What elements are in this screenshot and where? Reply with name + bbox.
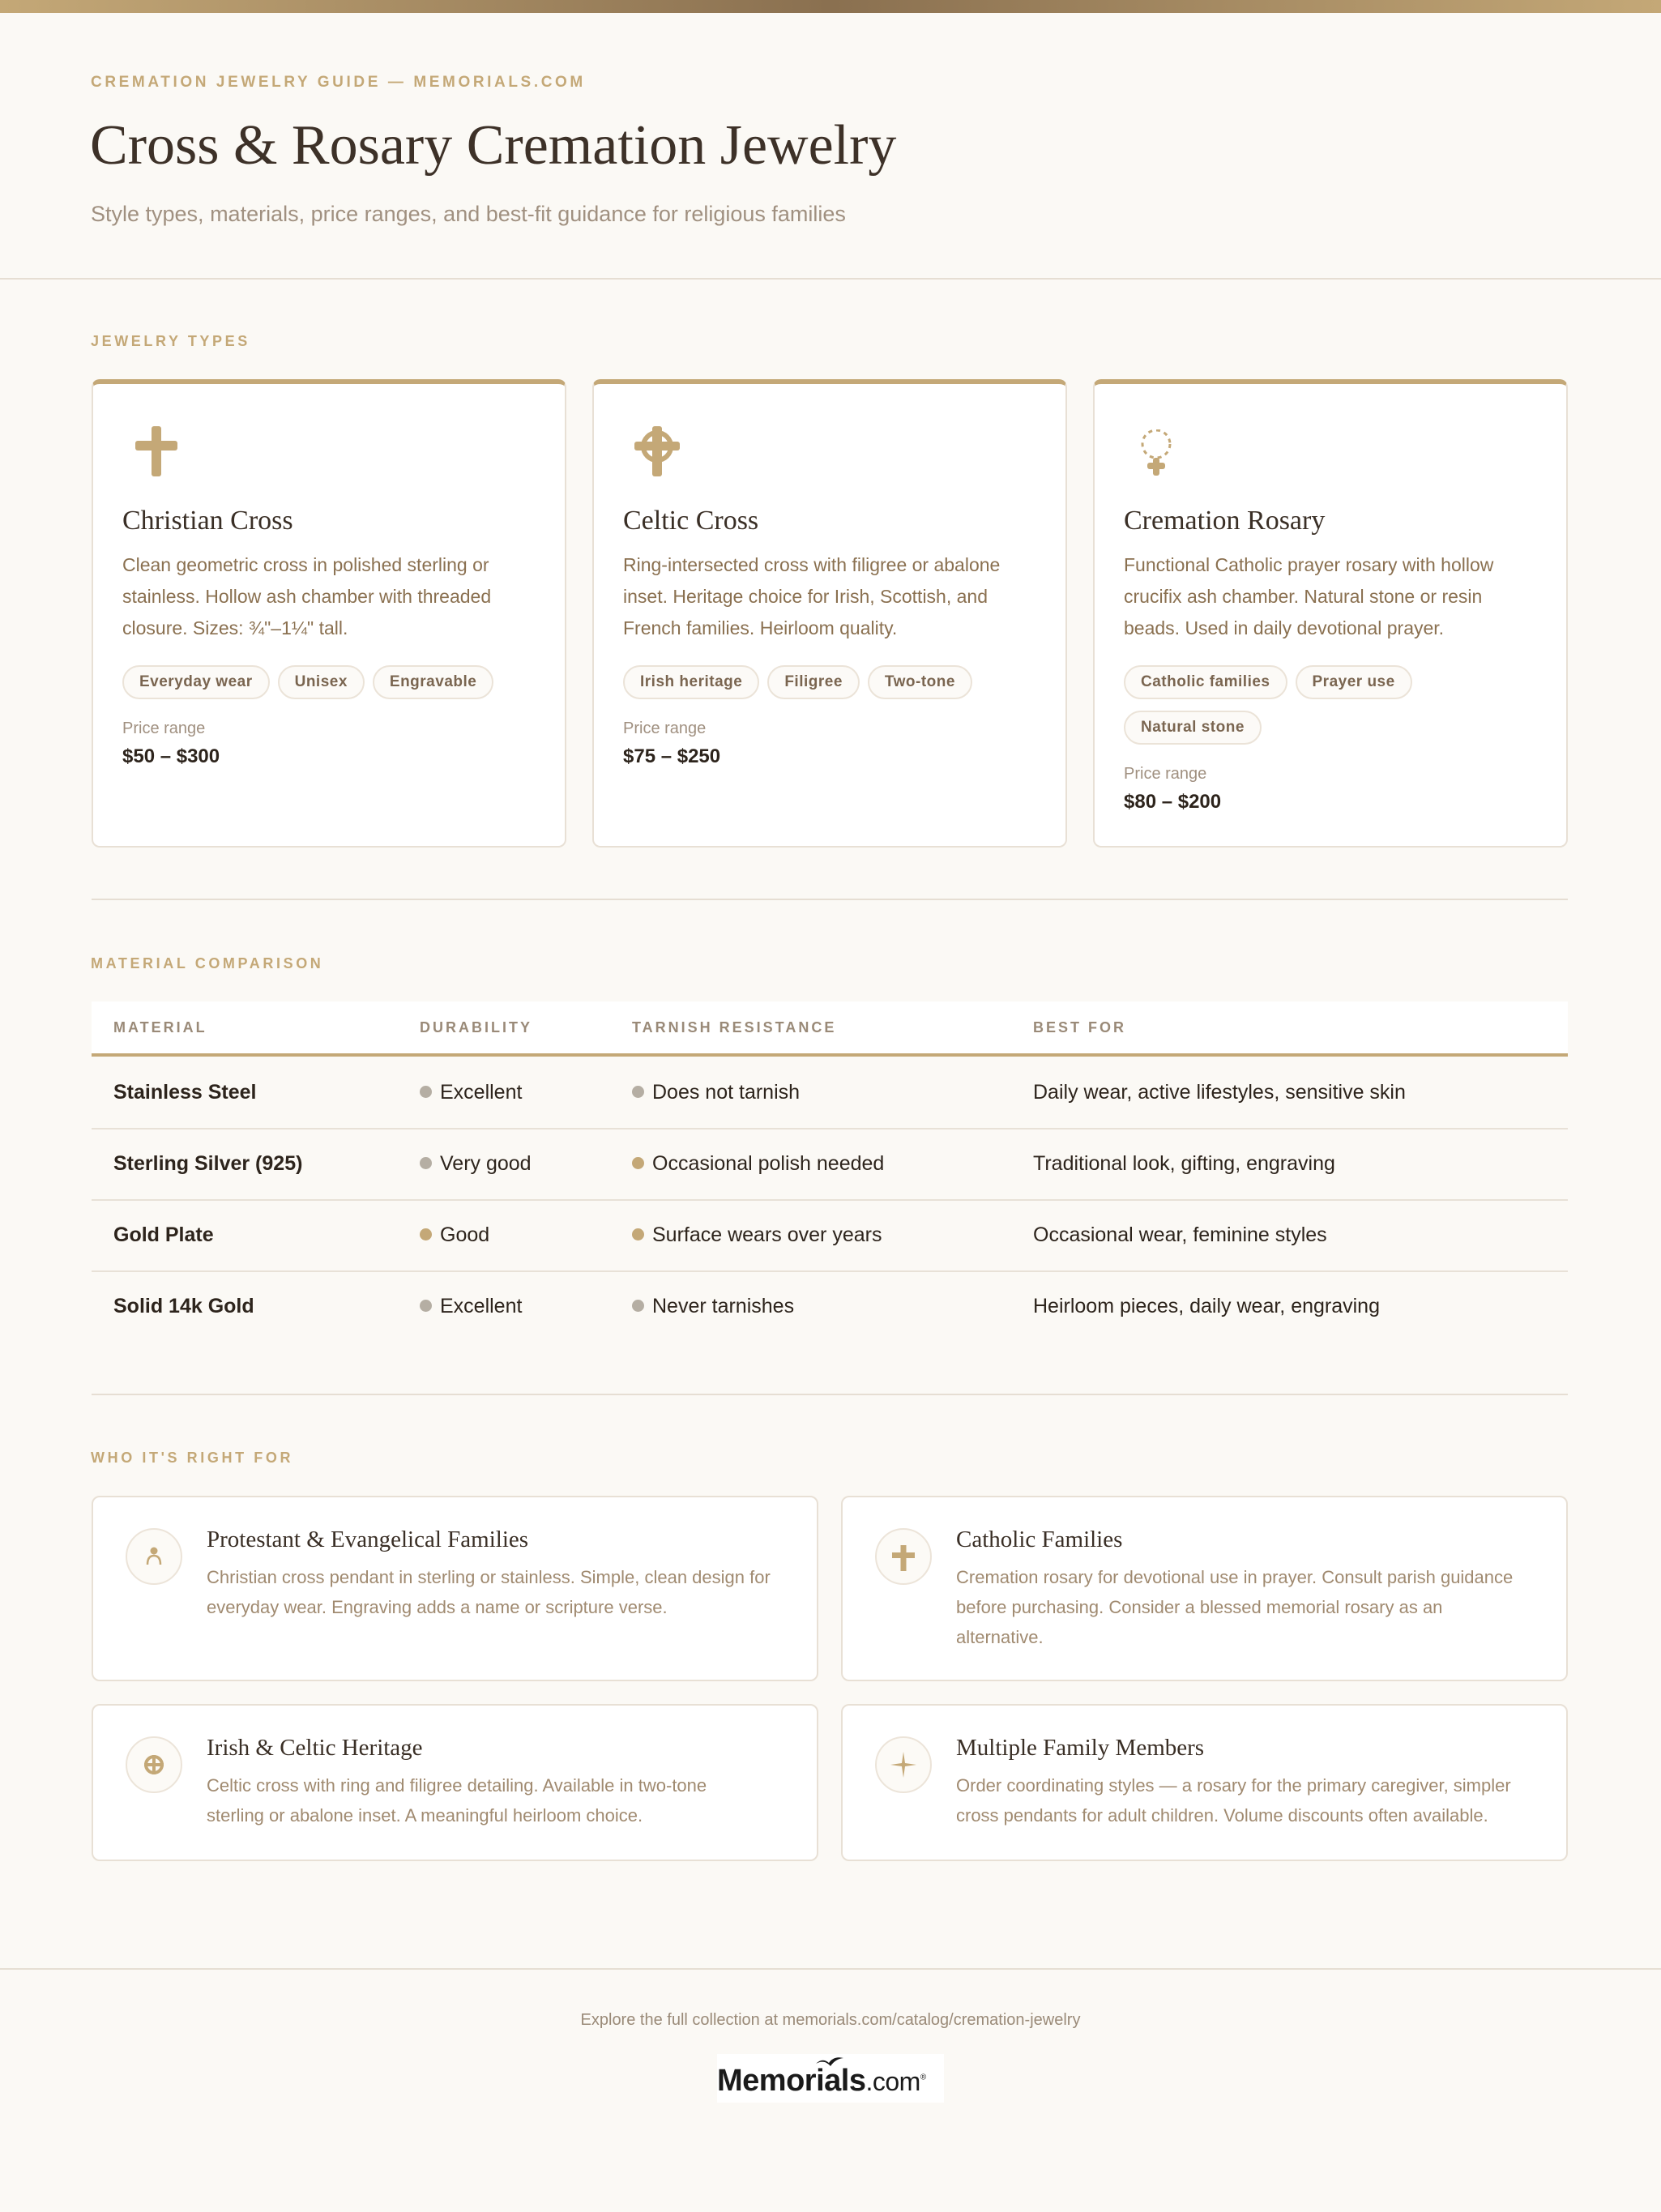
row: sterling silver: Very good <box>440 1152 532 1175</box>
logo <box>717 2054 944 2103</box>
panel: irish celtic <box>92 1704 818 1861</box>
top gradient bar <box>0 0 1661 13</box>
panel: catholic: Cremation rosary for devotional use in prayer. Consult parish guidance before purchasing. Consider a blessed memorial rosary as an alternative. <box>956 1567 1513 1647</box>
price: Price range <box>122 720 205 737</box>
logo: Memorials.com® <box>717 2064 926 2098</box>
eyebrow: CREMATION JEWELRY GUIDE — MEMORIALS.COM <box>91 74 586 91</box>
tags: Everyday wear <box>139 673 253 690</box>
tags <box>623 665 972 699</box>
price: Price range <box>623 720 706 737</box>
title: Celtic Cross <box>623 506 758 536</box>
title: Cremation Rosary <box>1124 506 1325 536</box>
tags: Two-tone <box>885 673 955 690</box>
panel: multiple family: Order coordinating styles — a rosary for the primary caregiver, simpler cross pendants for adult children. Volume discounts often available. <box>956 1775 1511 1826</box>
row: solid gold: Excellent <box>440 1295 522 1317</box>
panel: multiple family: Multiple Family Members <box>956 1735 1204 1761</box>
row: sterling silver: Occasional polish needed <box>652 1152 884 1175</box>
row: stainless steel: Does not tarnish <box>652 1081 800 1104</box>
icon: person <box>126 1528 182 1585</box>
title: Cross & Rosary Cremation Jewelry <box>90 114 896 177</box>
row: sterling silver <box>92 1129 1568 1201</box>
table: material comparison <box>92 1001 1568 1317</box>
section label: material comparison: MATERIAL COMPARISON <box>91 955 323 971</box>
panel: catholic <box>841 1496 1568 1681</box>
icon: rosary <box>1141 429 1172 476</box>
tags <box>122 665 493 699</box>
row: solid gold: Never tarnishes <box>652 1295 794 1317</box>
tags: Filigree <box>784 673 843 690</box>
row: stainless steel: Excellent <box>440 1081 522 1104</box>
tags: Natural stone <box>1141 719 1245 736</box>
row: solid gold <box>113 1295 1380 1317</box>
row: stainless steel: Stainless Steel <box>113 1081 256 1104</box>
row: stainless steel: Daily wear, active lifestyles, sensitive skin <box>1033 1081 1406 1104</box>
row: gold plate: Gold Plate <box>113 1223 214 1246</box>
panel: irish celtic: Celtic cross with ring and filigree detailing. Available in two-tone sterling or abalone inset. A meaningful heirloom choice. <box>207 1775 707 1826</box>
tags: Irish heritage <box>640 673 742 690</box>
title: Christian Cross <box>122 506 293 536</box>
tags: Engravable <box>390 673 476 690</box>
panel: protestant: Protestant & Evangelical Families <box>207 1527 528 1552</box>
icon: cross <box>875 1528 932 1585</box>
card: Celtic Cross <box>592 379 1067 848</box>
description: Ring-intersected cross with filigree or abalone inset. Heritage choice for Irish, Scottish, and French families. Heirloom quality. <box>623 554 1000 638</box>
row: sterling silver: Sterling Silver (925) <box>113 1152 302 1175</box>
panel: catholic: Catholic Families <box>956 1527 1122 1552</box>
table: material comparison: TARNISH RESISTANCE <box>632 1019 836 1036</box>
card: Cremation Rosary: $80 – $200 <box>1124 791 1221 813</box>
tags: Prayer use <box>1313 673 1395 690</box>
icon: cross <box>135 426 177 476</box>
section label: jewelry types: JEWELRY TYPES <box>91 333 250 349</box>
section label: who it's right for: WHO IT'S RIGHT FOR <box>91 1450 293 1466</box>
panel: irish celtic: Irish & Celtic Heritage <box>207 1735 423 1761</box>
panel: protestant: Christian cross pendant in sterling or stainless. Simple, clean design for everyday wear. Engraving adds a name or scripture verse. <box>207 1567 771 1617</box>
panel: protestant <box>92 1496 818 1681</box>
subtitle: Style types, materials, price ranges, and best-fit guidance for religious families <box>91 202 846 226</box>
card: Christian Cross <box>92 379 566 848</box>
row: gold plate: Surface wears over years <box>652 1223 882 1246</box>
row: solid gold: Heirloom pieces, daily wear, engraving <box>1033 1295 1380 1317</box>
row: gold plate: Good <box>440 1223 489 1246</box>
description: Clean geometric cross in polished sterling or stainless. Hollow ash chamber with threaded closure. Sizes: ¾"–1¼" tall. <box>122 554 491 638</box>
tags: Unisex <box>295 673 348 690</box>
row: gold plate <box>92 1201 1568 1272</box>
footer text: Explore the full collection at memorials.com/catalog/cremation-jewelry <box>581 2011 1080 2029</box>
icon: celtic cross <box>634 426 680 476</box>
table: material comparison: DURABILITY <box>420 1019 532 1036</box>
row: sterling silver: Traditional look, gifting, engraving <box>1033 1152 1335 1175</box>
table: material comparison: MATERIAL <box>113 1019 207 1036</box>
panel: multiple family <box>841 1704 1568 1861</box>
price: Price range <box>1124 765 1206 783</box>
row: solid gold: Solid 14k Gold <box>113 1295 254 1317</box>
tags <box>1124 665 1412 745</box>
row: stainless steel <box>92 1058 1568 1129</box>
description: Functional Catholic prayer rosary with hollow crucifix ash chamber. Natural stone or resin beads. Used in daily devotional prayer. <box>1124 554 1493 638</box>
icon: sparkle cross <box>875 1736 932 1793</box>
tags: Catholic families <box>1141 673 1270 690</box>
card: Christian Cross: $50 – $300 <box>122 745 220 767</box>
card: Cremation Rosary <box>1093 379 1568 848</box>
card: Celtic Cross: $75 – $250 <box>623 745 720 767</box>
icon: celtic <box>126 1736 182 1793</box>
table: material comparison: BEST FOR <box>1033 1019 1126 1036</box>
row: gold plate: Occasional wear, feminine styles <box>1033 1223 1327 1246</box>
